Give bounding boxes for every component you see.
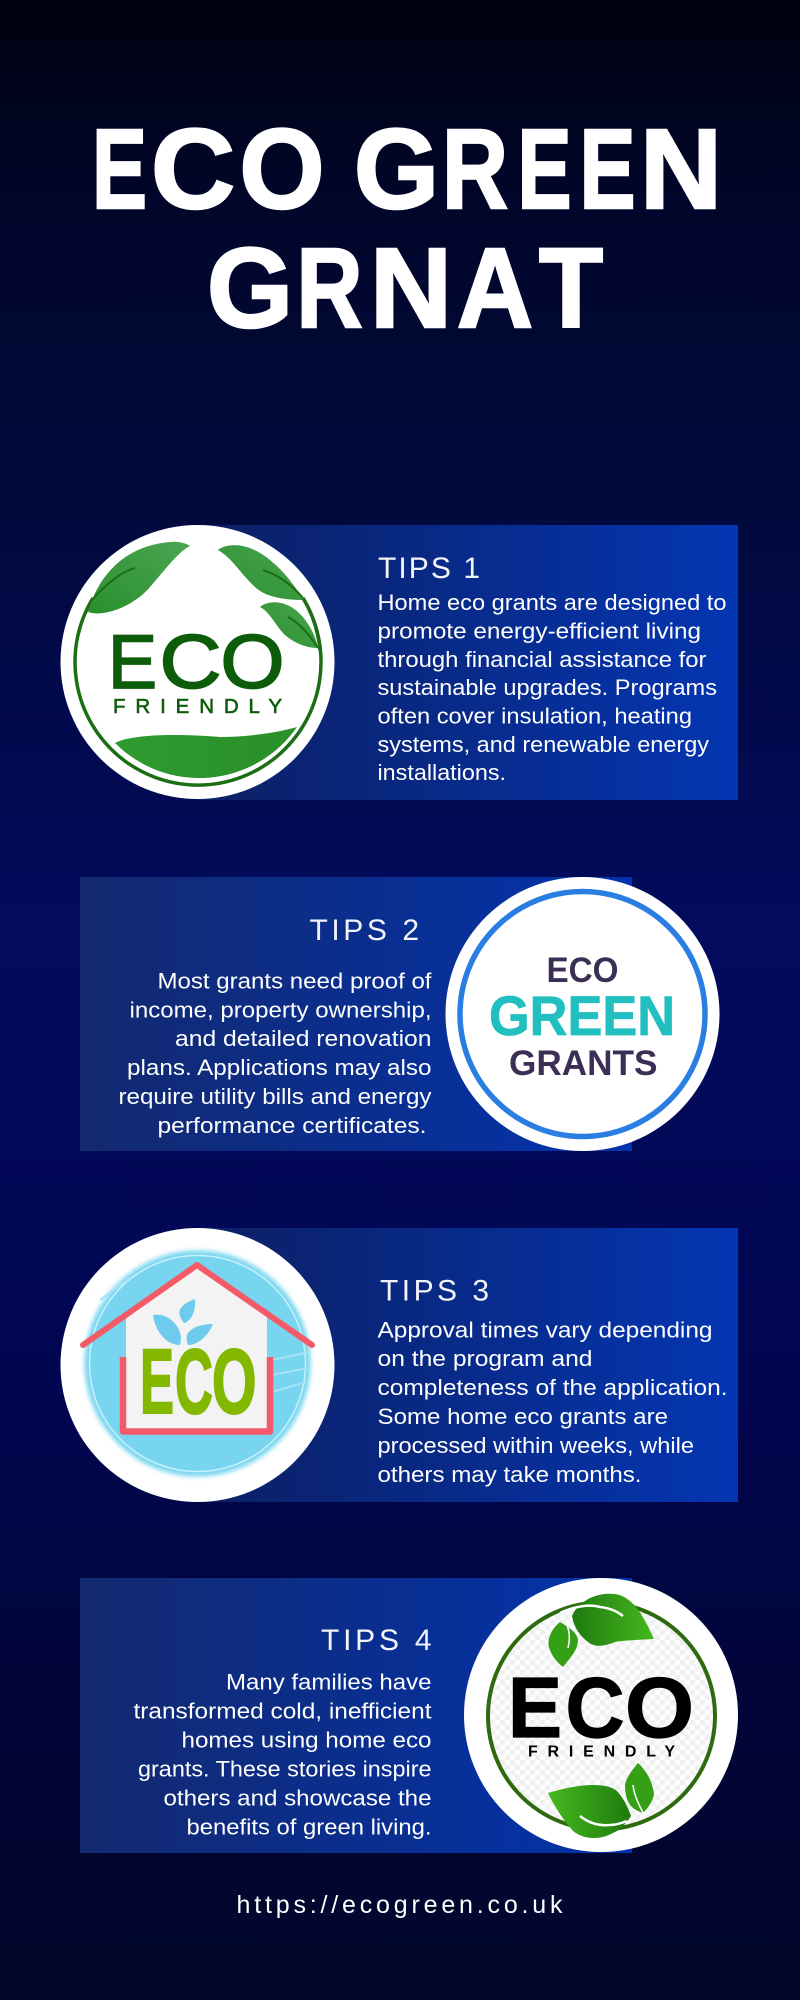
panel background 4 xyxy=(80,1578,632,1853)
title: O xyxy=(240,106,324,232)
icon: eco green grants badge: ECO xyxy=(546,951,618,990)
title: C xyxy=(151,106,235,232)
text block: tips 3: Some home eco grants are xyxy=(378,1404,668,1429)
text block: tips 2 xyxy=(118,968,432,1138)
panel background 1 xyxy=(197,525,738,800)
icon: eco green grants badge: GRANTS xyxy=(509,1044,658,1083)
text block: tips 1: through financial assistance for xyxy=(378,647,707,672)
panel: tips 2 xyxy=(80,877,720,1151)
text block: tips 3: Approval times vary depending xyxy=(378,1318,712,1342)
icon: eco friendly black badge: FRIENDLY xyxy=(528,1744,675,1760)
heading: tips 4: TIPS 4 xyxy=(321,1624,432,1657)
title: T xyxy=(539,225,603,351)
text block: tips 3: others may take months. xyxy=(378,1462,642,1487)
title: E xyxy=(518,106,572,232)
title xyxy=(92,106,722,351)
title: N xyxy=(640,106,722,232)
title: E xyxy=(580,106,636,232)
title: N xyxy=(370,225,452,351)
text block: tips 4: grants. These stories inspire xyxy=(138,1756,432,1782)
title: R xyxy=(296,225,362,351)
text block: tips 1: installations. xyxy=(378,760,506,785)
text block: tips 1 xyxy=(378,590,726,785)
panel: tips 1 xyxy=(60,525,738,800)
panel: tips 4 xyxy=(80,1578,738,1853)
heading: tips 3: TIPS 3 xyxy=(380,1274,489,1308)
title: G xyxy=(354,106,439,232)
footer url: https://ecogreen.co.uk xyxy=(236,1891,563,1919)
text block: tips 1: often cover insulation, heating xyxy=(378,704,692,728)
text block: tips 4: transformed cold, inefficient xyxy=(134,1698,432,1724)
icon: eco friendly leaf badge: C xyxy=(160,620,222,705)
icon: eco friendly black badge: C xyxy=(566,1661,624,1756)
text block: tips 2: plans. Applications may also xyxy=(127,1055,432,1080)
text block: tips 1: sustainable upgrades. Programs xyxy=(378,675,717,700)
icon: eco friendly leaf badge: E xyxy=(108,620,157,705)
text block: tips 4: Many families have xyxy=(226,1670,432,1694)
title: G xyxy=(207,225,293,351)
text block: tips 2: and detailed renovation xyxy=(175,1026,432,1051)
text block: tips 3 xyxy=(378,1318,728,1487)
title: R xyxy=(442,106,508,232)
icon: eco house badge: E xyxy=(140,1331,174,1433)
icon: eco house badge xyxy=(60,1228,334,1502)
icon: eco friendly black badge: E xyxy=(508,1661,562,1756)
text block: tips 3: on the program and xyxy=(378,1346,592,1371)
panel background 3 xyxy=(197,1228,738,1502)
text block: tips 4: homes using home eco xyxy=(182,1728,432,1752)
text block: tips 3: processed within weeks, while xyxy=(378,1433,694,1458)
text block: tips 4 xyxy=(134,1670,432,1840)
icon: eco green grants badge xyxy=(446,877,720,1151)
icon: eco friendly leaf badge: FRIENDLY xyxy=(113,695,282,718)
text block: tips 1: systems, and renewable energy xyxy=(378,732,710,757)
text block: tips 1: Home eco grants are designed to xyxy=(378,590,726,615)
icon: eco green grants badge: GREEN xyxy=(489,984,675,1047)
panel background 2 xyxy=(80,877,632,1151)
icon: eco house badge: C xyxy=(175,1331,213,1433)
text block: tips 3: completeness of the application. xyxy=(378,1375,728,1400)
icon: eco house badge: O xyxy=(212,1331,256,1433)
text block: tips 4: benefits of green living. xyxy=(186,1814,432,1840)
heading: tips 1: TIPS 1 xyxy=(378,552,480,585)
icon: eco friendly leaf badge: O xyxy=(220,620,284,705)
title: E xyxy=(92,106,147,232)
icon: eco friendly leaf badge xyxy=(60,525,334,799)
text block: tips 1: promote energy-efficient living xyxy=(378,618,701,644)
text block: tips 4: others and showcase the xyxy=(164,1786,432,1810)
icon: eco friendly black badge xyxy=(464,1578,738,1852)
heading: tips 2: TIPS 2 xyxy=(310,914,419,947)
title: A xyxy=(457,225,533,351)
text block: tips 2: Most grants need proof of xyxy=(158,968,432,994)
panel: tips 3 xyxy=(60,1228,738,1502)
text block: tips 2: income, property ownership, xyxy=(130,998,432,1022)
icon: eco friendly black badge: O xyxy=(625,1661,694,1756)
text block: tips 2: performance certificates. xyxy=(158,1113,426,1138)
text block: tips 2: require utility bills and energy xyxy=(118,1084,432,1109)
